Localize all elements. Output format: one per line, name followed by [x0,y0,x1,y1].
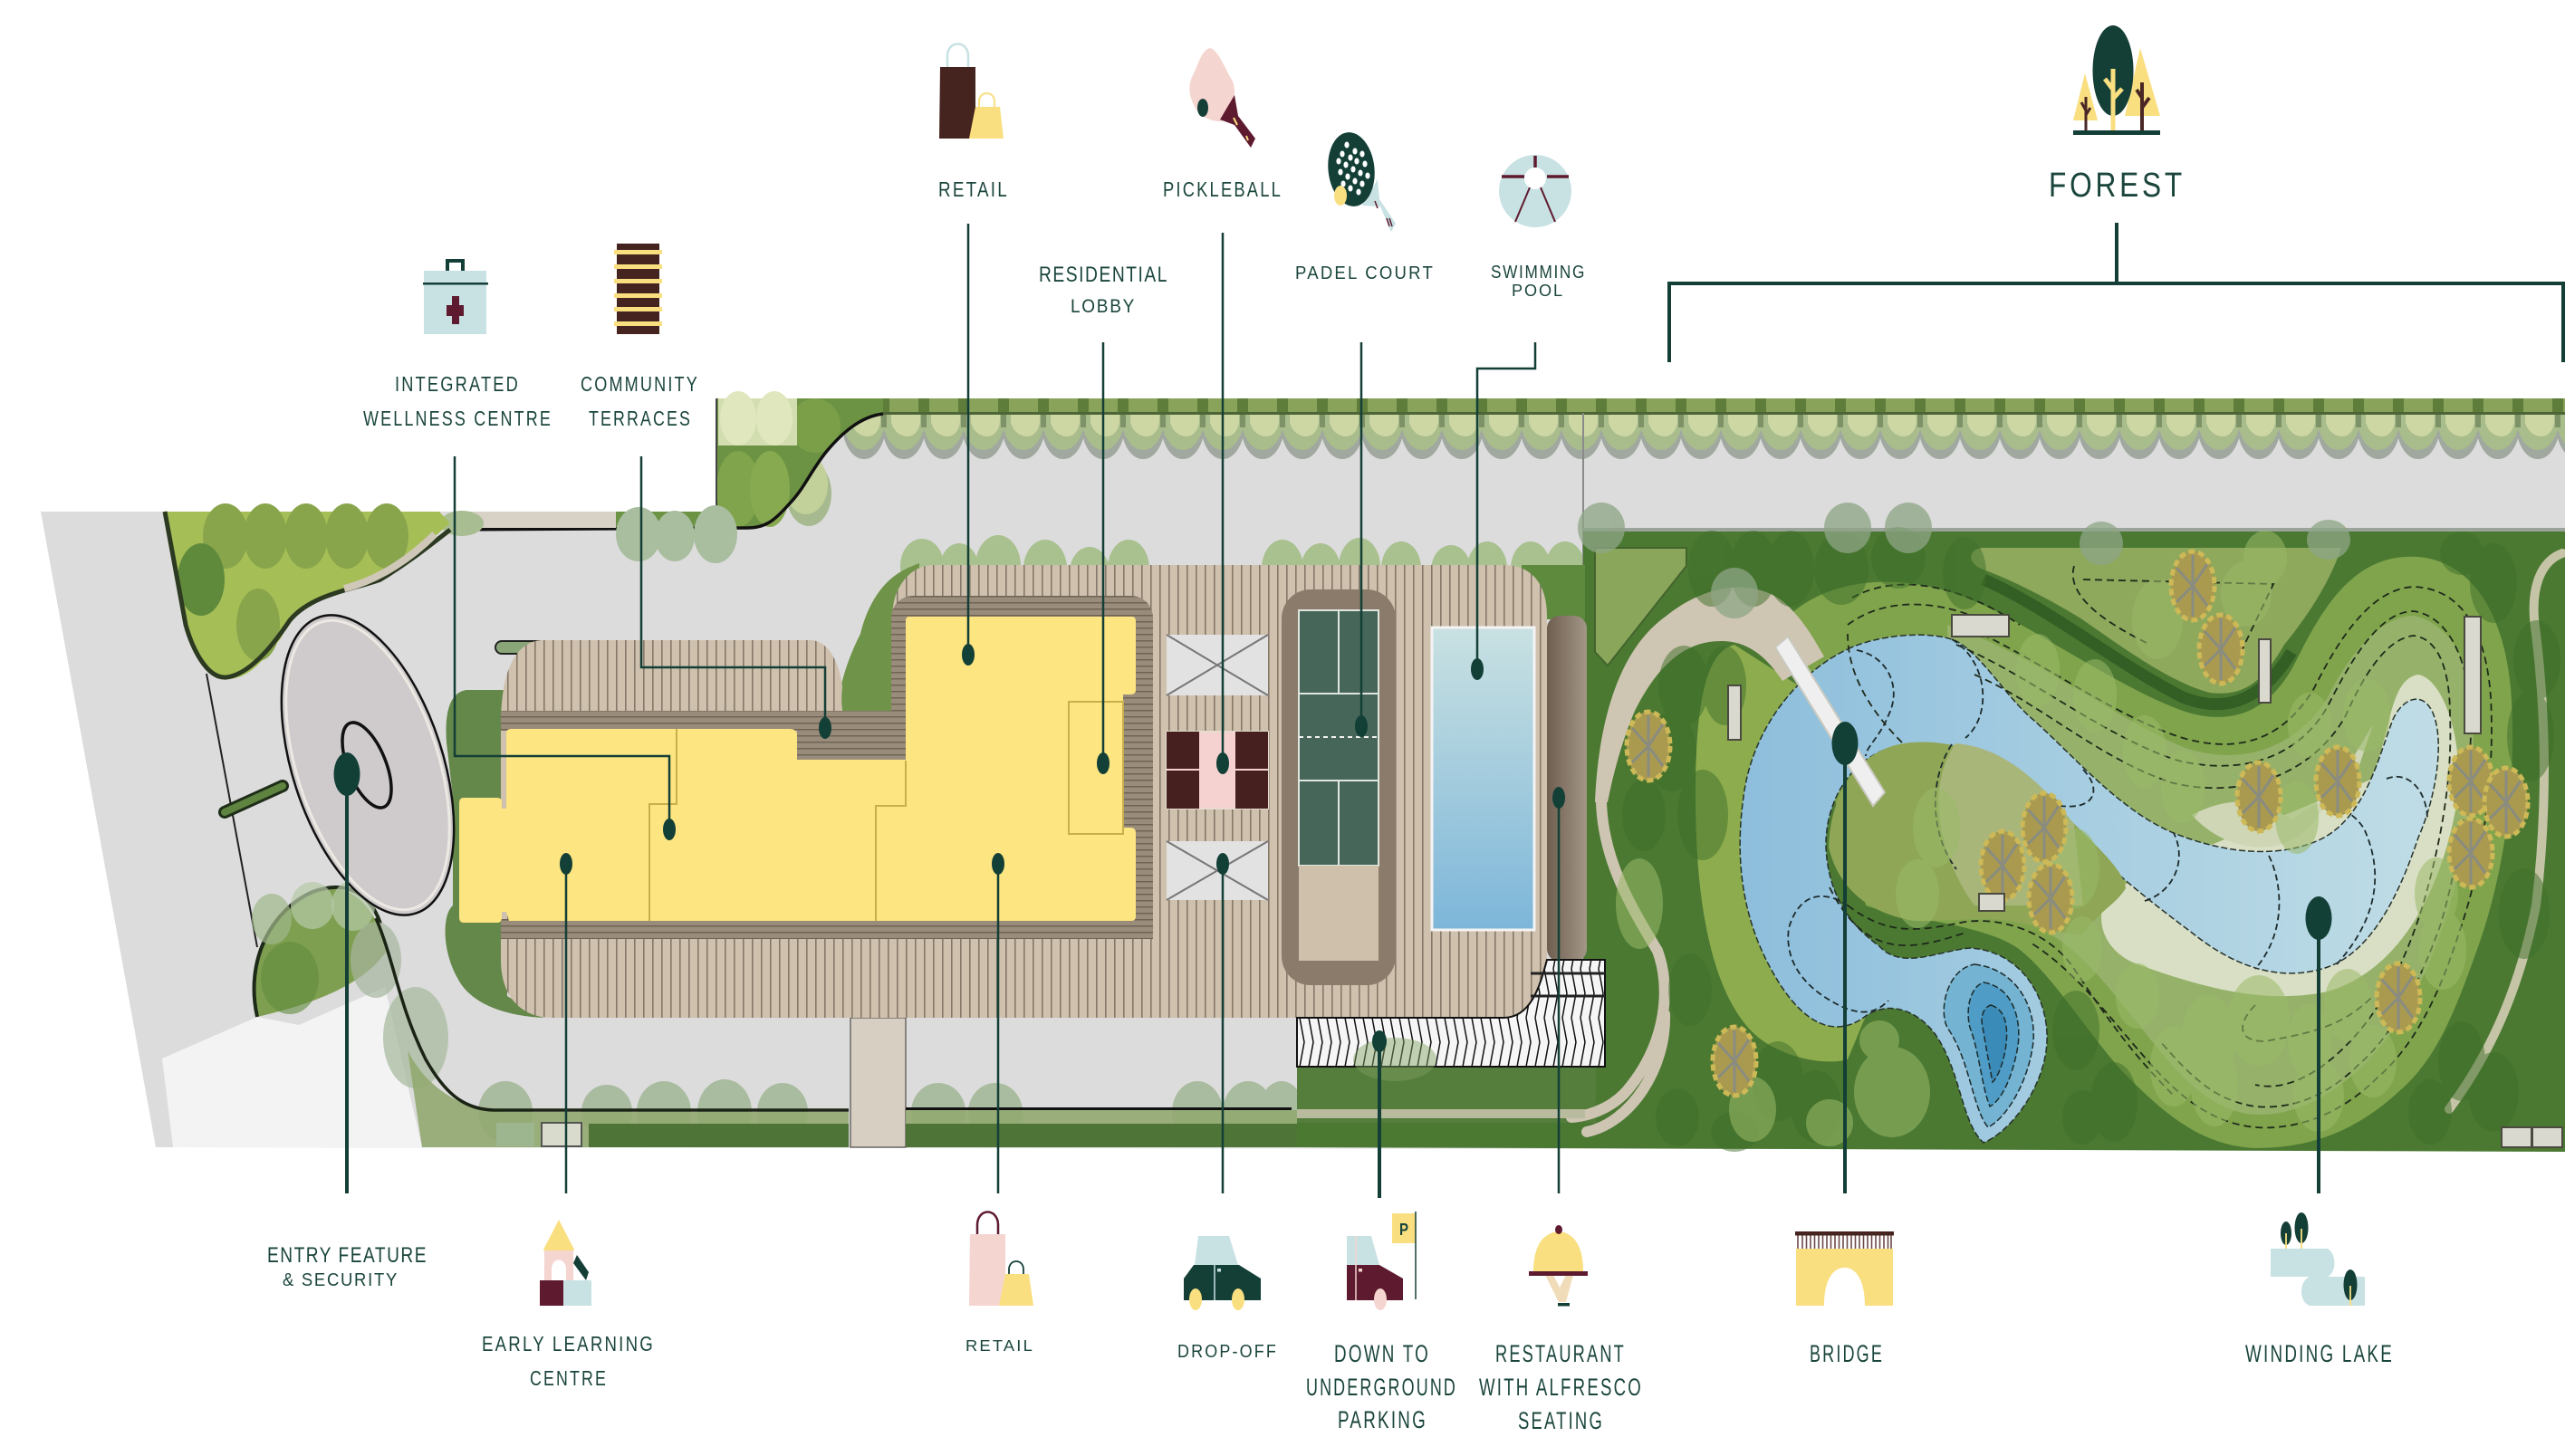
callout: swimming pool [1471,155,1586,680]
label: community terraces: COMMUNITY [581,372,699,396]
rooftop deck [501,565,1547,1018]
callout: pickleball [1163,48,1282,774]
leader line: pickleball [1216,233,1229,774]
callout: underground parking [1306,1030,1457,1433]
label: padel court: PADEL COURT [1295,263,1435,283]
beige footpath [1595,588,1824,802]
lower skylight [1167,841,1268,900]
leader line: terraces [641,456,831,739]
callout: integrated wellness centre [363,261,676,840]
icon: medical case [423,261,488,334]
south road edge curve [376,918,849,1110]
icon: shopping bags [969,1212,1033,1306]
leader line: parking [1372,1030,1387,1198]
road trees south [383,987,1304,1145]
road and ground surface [41,398,2565,1150]
callout: forest [2049,25,2186,205]
small site structures [1728,615,2562,1147]
neighbouring white plot [162,987,422,1147]
tree canopies overhanging the forest edge [1578,503,2350,618]
hedge by building [446,690,543,1018]
beige footpath continuations [1571,553,2562,1117]
icon: pool ring [1499,155,1571,227]
callout: retail top [938,43,1009,666]
callout: entry feature and security [267,752,428,1290]
top planting strip [844,398,2565,414]
pale meadow north of lake [2192,724,2373,848]
diagonal boundary line [207,674,257,947]
forest trees, dark [1622,527,2560,1152]
road trees north of deck [900,535,1585,598]
inner hill band [1947,616,2474,1115]
callout: restaurant [1479,787,1643,1434]
label: down to underground parking: UNDERGROUND [1306,1374,1457,1401]
label: entry feature: & SECURITY [283,1269,399,1290]
callout: padel court [1295,130,1435,737]
label: swimming pool: SWIMMING [1491,263,1586,283]
bridge deck [1775,637,1885,806]
north-east olive band [1971,548,2341,694]
callout: residential lobby [1039,263,1168,774]
parking ramp [1297,960,1605,1081]
north-west planter [165,503,450,679]
icon: pickleball paddle [1189,48,1255,148]
icon: lake with trees [2271,1212,2365,1306]
entry stub inner [225,786,283,812]
callout: bridge [1795,722,1894,1367]
site plan [41,391,2565,1152]
label: restaurant with alfresco seating: RESTAURANT [1495,1340,1626,1367]
label: entry feature: ENTRY FEATURE [267,1243,428,1268]
icon: car with parking sign [1347,1212,1416,1310]
icon: stacked terraces [614,244,662,334]
label: down to underground parking: DOWN TO [1334,1340,1430,1367]
swimming pool [1432,627,1534,930]
heading: forest: FOREST [2049,167,2186,205]
leader line: pool [1471,342,1535,680]
label: early learning centre: CENTRE [530,1366,608,1390]
callout: winding lake [2245,896,2394,1367]
label: restaurant with alfresco seating: WITH ALFRESCO [1479,1374,1643,1401]
forest ground [1297,528,2565,1152]
icon: toy blocks [540,1220,591,1306]
callout: retail bottom [965,853,1034,1355]
label: bridge: BRIDGE [1810,1340,1884,1367]
dark decking bands [501,596,1153,939]
icon: serving cloche [1529,1225,1588,1306]
label: drop-off: DROP-OFF [1177,1341,1278,1362]
south green verge [408,1050,849,1147]
north boundary line [883,412,2565,415]
callout: drop-off [1177,853,1278,1362]
pale meadow around east lake [2101,675,2458,996]
label: residential lobby: LOBBY [1071,296,1136,317]
pickleball courts [1167,732,1268,809]
lake inner dashes [1788,639,2427,1012]
label: pickleball: PICKLEBALL [1163,177,1282,201]
label: swimming pool: POOL [1512,282,1564,300]
leader line: wellness [455,456,676,840]
icon: arched bridge [1795,1231,1894,1306]
green lawn west of lake [1696,645,1866,1061]
callout: community terraces [581,244,831,739]
padel court [1282,589,1396,985]
icon: padel racket [1324,130,1396,232]
leader line: early learning [560,853,572,1193]
restaurant strip [1547,616,1587,962]
building block lines [649,702,1123,921]
yellow building footprint [459,617,1136,923]
south green strip [906,1107,1587,1147]
leader line: retail [962,224,975,666]
east curved edge by parking [1587,1014,1665,1132]
leader line: lobby [1097,342,1110,774]
entry stub [225,786,283,812]
north-west planting notch [440,391,883,563]
label: retail: RETAIL [938,177,1009,201]
deep pond [1944,964,2033,1127]
south-west planter [252,880,401,1017]
label: retail: RETAIL [965,1336,1034,1355]
hill band around lake [1789,557,2512,1148]
icon: shopping bags [939,43,1004,139]
roundabout [248,594,487,936]
label: integrated wellness centre: INTEGRATED [395,372,520,396]
label: down to underground parking: PARKING [1338,1406,1427,1433]
south forecourt path [1297,1109,1585,1118]
label: restaurant with alfresco seating: SEATING [1518,1407,1604,1434]
upper skylight [1167,635,1268,695]
dark strip along olive band [1984,580,2291,704]
forest trees, light [1616,531,2466,1146]
vertical line at forest edge [1582,413,1584,565]
winding lake [1740,635,2438,1143]
label: winding lake: WINDING LAKE [2245,1340,2394,1367]
label: integrated wellness centre: WELLNESS CENTRE [363,407,552,430]
forest bracket [1669,223,2563,362]
tree row along north boundary [844,413,2565,467]
contour dashes [1830,566,2492,1127]
leader line: retail bottom [992,853,1004,1193]
island [1829,742,2126,934]
icon: car with parking sign: P [1399,1221,1408,1239]
green blob over deck corner [841,566,913,715]
icon: car [1184,1236,1261,1310]
leader line: restaurant [1552,787,1565,1193]
icon: forest trees [2073,25,2160,135]
corner feature in forest [1595,548,1686,666]
green blob by tower [838,563,919,715]
leader line: bridge [1831,722,1859,1193]
leader line: entry [333,752,360,1193]
entry pill [495,641,550,654]
label: residential lobby: RESIDENTIAL [1039,263,1168,287]
golden feature trees [1627,551,2528,1096]
callout: early learning centre [482,853,655,1390]
label: early learning centre: EARLY LEARNING [482,1332,655,1355]
south driveway [850,1018,906,1147]
label: community terraces: TERRACES [589,407,692,430]
leader line: lake [2306,896,2331,1193]
leader line: padel [1355,342,1368,737]
leader line: drop-off [1216,853,1229,1193]
